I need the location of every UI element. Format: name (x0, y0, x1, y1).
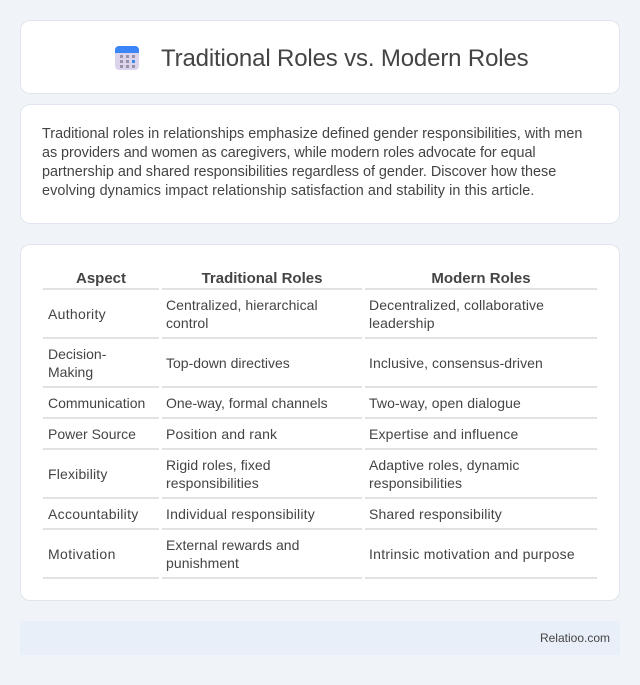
row: power source: Position and rank (166, 426, 277, 442)
row: decision-making: Decision- (48, 346, 106, 362)
row: authority: Authority (48, 306, 106, 322)
row: authority: Decentralized, collaborative (369, 297, 544, 313)
table header: traditional roles: Traditional Roles (202, 270, 322, 287)
row: flexibility (48, 457, 519, 491)
row: decision-making: Inclusive, consensus-driven (369, 355, 543, 371)
row: authority: leadership (369, 315, 435, 331)
row: authority: control (166, 315, 208, 331)
row: flexibility: responsibilities (166, 475, 259, 491)
row: flexibility: Flexibility (48, 466, 108, 482)
row: communication (48, 395, 521, 411)
row: power source: Expertise and influence (369, 426, 518, 442)
row: accountability: Accountability (48, 506, 139, 522)
row: accountability: Individual responsibility (166, 506, 315, 522)
table header: aspect: Aspect (76, 270, 126, 287)
row: decision-making: Top-down directives (166, 355, 290, 371)
intro text: Traditional roles in relationships emphasize defined gender responsibilities, with men (42, 126, 582, 142)
intro text: as providers and women as caregivers, while modern roles advocate for equal (42, 145, 536, 161)
row: motivation: punishment (166, 555, 239, 571)
intro text (42, 126, 582, 199)
footer text: Relatioo.com (540, 631, 610, 645)
row: communication: Two-way, open dialogue (369, 395, 521, 411)
panel: title card (20, 20, 620, 94)
row: motivation (48, 537, 575, 571)
table header: modern roles: Modern Roles (431, 270, 531, 287)
row: power source: Power Source (48, 426, 136, 442)
row: communication: Communication (48, 395, 145, 411)
panel: introduction (20, 104, 620, 224)
row: motivation: Motivation (48, 546, 116, 562)
row: decision-making (48, 346, 543, 380)
row: flexibility: responsibilities (369, 475, 462, 491)
title: Traditional Roles vs. Modern Roles (161, 45, 528, 72)
intro text: evolving dynamics impact relationship satisfaction and stability in this article. (42, 183, 534, 199)
row: authority: Centralized, hierarchical (166, 297, 318, 313)
row: decision-making: Making (48, 364, 93, 380)
row: communication: One-way, formal channels (166, 395, 328, 411)
row: motivation: External rewards and (166, 537, 300, 553)
row: power source (48, 426, 518, 442)
row: flexibility: Adaptive roles, dynamic (369, 457, 519, 473)
row: accountability (48, 506, 502, 522)
row: accountability: Shared responsibility (369, 506, 502, 522)
intro text: partnership and shared responsibilities regardless of gender. Discover how these (42, 164, 556, 180)
row: motivation: Intrinsic motivation and purpose (369, 546, 575, 562)
icon: calendar (115, 46, 139, 70)
panel: comparison table (20, 244, 620, 601)
row: authority (48, 297, 544, 331)
row: flexibility: Rigid roles, fixed (166, 457, 271, 473)
footer bar (20, 621, 620, 655)
